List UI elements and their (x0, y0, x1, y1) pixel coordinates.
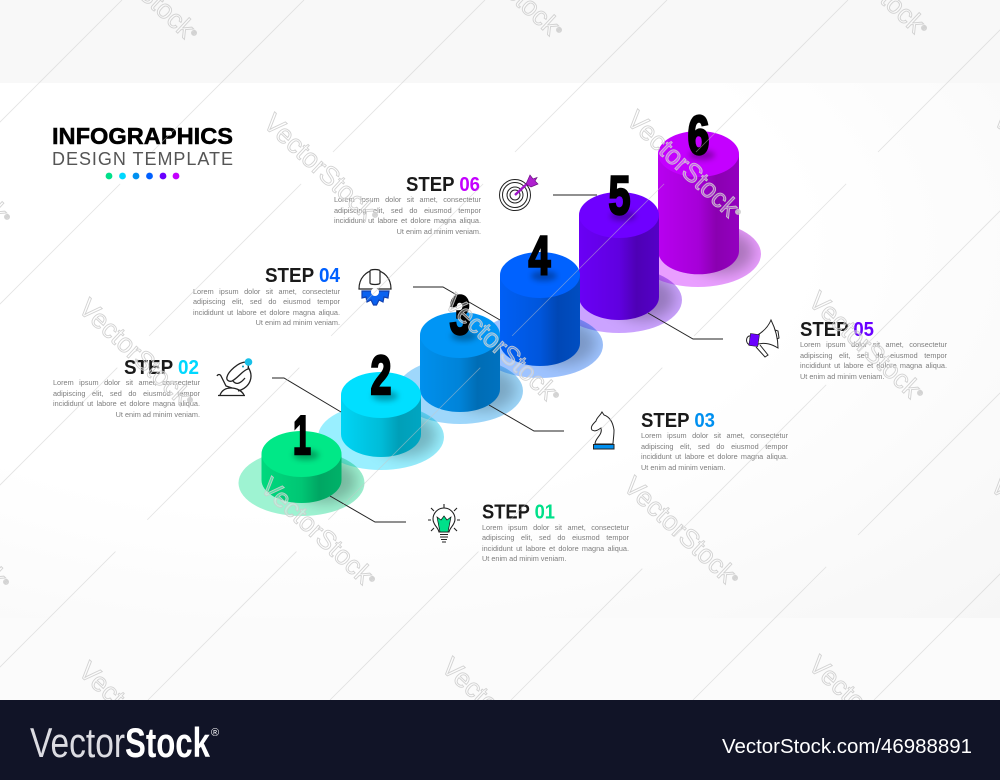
watermark overlay: ® (915, 388, 925, 398)
footer bar (0, 700, 1000, 780)
watermark overlay: VectorStock (439, 287, 563, 406)
text block: step 05: Ut enim ad minim veniam. (800, 372, 884, 381)
watermark overlay: VectorStock (803, 649, 927, 768)
text block: step 06: Lorem ipsum dolor sit amet, consectetur (334, 195, 481, 204)
heading: step 01: STEP 01 (482, 502, 555, 524)
watermark overlay: ® (1, 577, 11, 587)
text block: step 02: incididunt ut labore et dolore magna aliqua. (53, 399, 200, 408)
watermark overlay: VectorStock (258, 107, 382, 226)
text block: step 03: incididunt ut labore et dolore magna aliqua. (641, 452, 788, 461)
text block: step 04: Ut enim ad minim veniam. (256, 318, 340, 327)
text block: step 05: Lorem ipsum dolor sit amet, consectetur (800, 340, 947, 349)
text block: step 02: adipiscing elit, sed do eiusmod tempor (53, 389, 200, 398)
text block: step 01: adipiscing elit, sed do eiusmod tempor (482, 533, 629, 542)
watermark overlay: ® (730, 573, 740, 583)
connector: step 03 (489, 405, 564, 431)
footer url: VectorStock.com/46988891 (722, 736, 972, 758)
footer logo: ® (211, 727, 219, 739)
text block: step 05: adipiscing elit, sed do eiusmod tempor (800, 351, 947, 360)
icon: target with dart (500, 175, 538, 210)
cylinder 5 (579, 192, 682, 333)
watermark overlay: VectorStock (621, 104, 745, 223)
title colour dots (106, 173, 179, 179)
icon: light bulb (428, 504, 460, 542)
cylinder 1 (238, 431, 364, 516)
text block: step 03 (641, 431, 788, 472)
text block: step 01: Ut enim ad minim veniam. (482, 554, 566, 563)
heading: step 02: STEP 02 (124, 357, 199, 379)
cylinder 3 (397, 312, 523, 424)
text block: step 04: incididunt ut labore et dolore magna aliqua. (193, 308, 340, 317)
text block: step 03: Ut enim ad minim veniam. (641, 463, 725, 472)
footer logo: Stock (125, 719, 210, 766)
watermark overlay: ® (2, 212, 12, 222)
base artwork: background, cylinders, icons, headings (53, 114, 1000, 618)
text block: step 06: Ut enim ad minim veniam. (397, 227, 481, 236)
text block: step 05: incididunt ut labore et dolore magna aliqua. (800, 361, 947, 370)
text block: step 01 (482, 522, 629, 563)
watermark overlay: ® (733, 207, 743, 217)
watermark overlay: VectorStock (803, 285, 927, 404)
watermark overlay: ® (189, 28, 199, 38)
text block: step 04 (193, 286, 340, 327)
watermark overlay: VectorStock (73, 292, 197, 411)
watermark overlay: ® (185, 758, 195, 768)
number 1: 1 (293, 404, 311, 466)
text block: step 01: incididunt ut labore et dolore magna aliqua. (482, 544, 629, 553)
connector: step 06 (553, 194, 597, 196)
connector: step 01 (330, 496, 406, 522)
footer logo: Vector (30, 719, 125, 766)
number 3: 3 (450, 284, 470, 346)
text block: step 06 (334, 195, 481, 236)
title: DESIGN TEMPLATE (52, 149, 233, 169)
number 4: 4 (528, 224, 551, 286)
watermark overlay: ® (915, 752, 925, 762)
text block: step 04: Lorem ipsum dolor sit amet, consectetur (193, 286, 340, 296)
text block: step 06: adipiscing elit, sed do eiusmod tempor (334, 206, 481, 215)
text block: step 05 (800, 340, 947, 381)
watermark overlay: VectorStock (618, 470, 742, 589)
watermark overlay: ® (548, 754, 558, 764)
text block: step 02: Lorem ipsum dolor sit amet, consectetur (53, 378, 200, 387)
text block: step 03: Lorem ipsum dolor sit amet, consectetur (641, 431, 788, 440)
icon: microscope (217, 358, 252, 396)
connector: step 02 (272, 378, 341, 412)
cylinder 6 (658, 132, 761, 287)
watermark overlay: ® (551, 390, 561, 400)
text block: step 02 (53, 378, 200, 419)
cylinder 2 (318, 372, 444, 470)
icon: megaphone (746, 320, 779, 357)
number 5: 5 (608, 164, 630, 226)
text block: step 01: Lorem ipsum dolor sit amet, consectetur (482, 522, 629, 532)
number 2: 2 (370, 344, 392, 406)
connector: step 04 (413, 287, 500, 320)
title (52, 123, 233, 169)
text block: step 02: Ut enim ad minim veniam. (116, 410, 200, 419)
connector: step 05 (648, 313, 723, 339)
watermark overlay: ® (370, 210, 380, 220)
watermark overlay: ® (367, 574, 377, 584)
watermark overlay: ® (554, 25, 564, 35)
heading: step 03: STEP 03 (641, 410, 715, 432)
watermark overlay: VectorStock (73, 655, 197, 774)
heading: step 06: STEP 06 (406, 174, 480, 196)
watermark overlay: VectorStock (436, 651, 560, 770)
watermark overlay: ® (185, 395, 195, 405)
number 6: 6 (688, 104, 710, 166)
icon: hard hat with gear (359, 270, 391, 305)
cylinder 4 (494, 252, 603, 378)
footer logo (30, 719, 219, 766)
heading: step 05: STEP 05 (800, 319, 874, 341)
text block: step 03: adipiscing elit, sed do eiusmod tempor (641, 442, 788, 451)
icon: chess knight (591, 412, 614, 449)
heading: step 04: STEP 04 (265, 265, 341, 287)
watermark overlay: VectorStock (255, 471, 379, 590)
text block: step 04: adipiscing elit, sed do eiusmod tempor (193, 297, 340, 306)
text block: step 06: incididunt ut labore et dolore magna aliqua. (334, 216, 481, 225)
title: INFOGRAPHICS (52, 123, 233, 149)
watermark overlay: ® (919, 23, 929, 33)
